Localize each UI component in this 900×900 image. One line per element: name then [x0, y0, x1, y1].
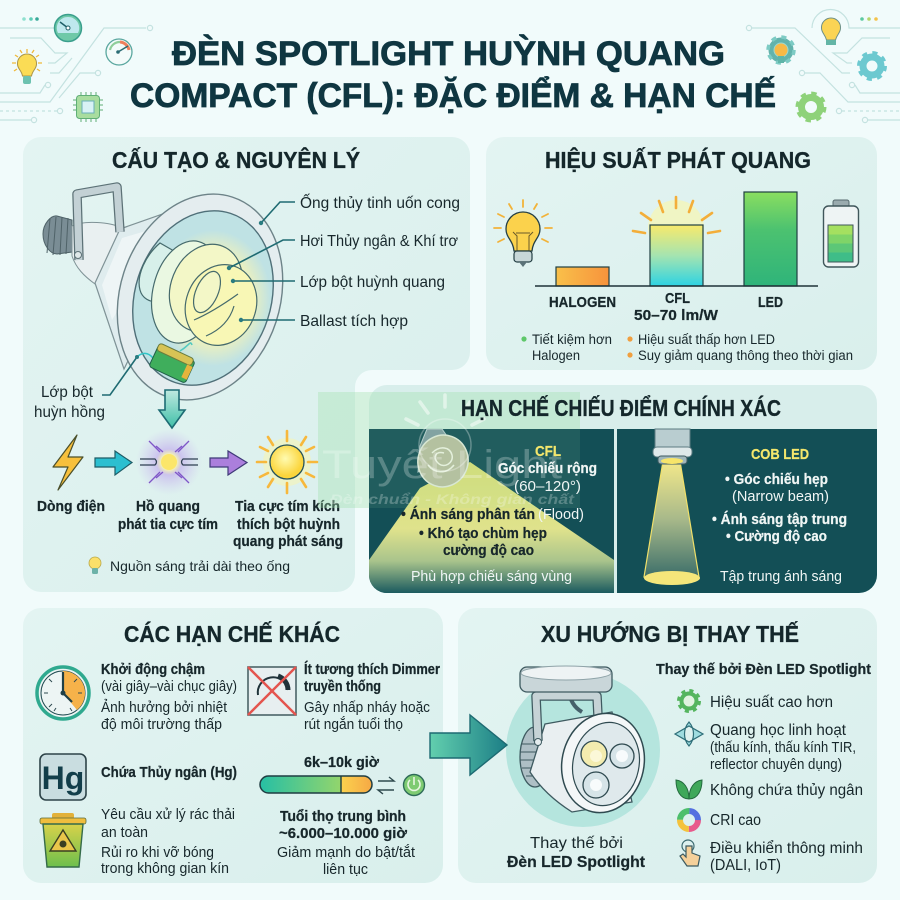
icon: battery — [824, 200, 858, 267]
icon: speedometer — [106, 39, 132, 65]
icon: sun — [257, 431, 317, 493]
icon: small bulb — [89, 557, 101, 574]
text: dimmer — [304, 661, 440, 733]
label: lớp bột huỳn hồng — [34, 384, 105, 421]
heading: HIỆU SUẤT PHÁT QUANG — [545, 146, 811, 173]
text: cob led: (Narrow beam) — [732, 488, 829, 505]
text: dimmer: Gây nhấp nháy hoặc — [304, 699, 430, 716]
icon: swap arrows — [378, 777, 394, 794]
panel: cấu tạo & nguyên lý — [23, 137, 470, 592]
heading: hạn chế chiếu điểm: HẠN CHẾ CHIẾU ĐIỂM CHÍNH XÁC — [461, 394, 781, 421]
text: cfl: Góc chiếu rộng — [498, 460, 597, 477]
icon: cob lamp — [653, 429, 692, 464]
heading: CÁC HẠN CHẾ KHÁC — [124, 620, 340, 647]
label: cfl: CFL — [665, 290, 690, 307]
label: tia cực tím: quang phát sáng — [233, 533, 343, 550]
icon: Hg: Hg — [42, 760, 84, 796]
arrow: down — [159, 390, 185, 428]
panel: các hạn chế khác — [23, 608, 443, 883]
icon: CFL spotlight cutaway — [43, 172, 309, 422]
spiral tube — [139, 233, 268, 355]
text: cfl: (60–120°) — [514, 478, 581, 495]
panel: hạn chế chiếu điểm chính xác — [369, 385, 877, 593]
text: tuổi thọ: liên tục — [323, 861, 368, 878]
icon: clock — [37, 667, 89, 719]
text: cfl: Phù hợp chiếu sáng vùng — [411, 568, 572, 585]
label: tia cực tím — [233, 498, 343, 550]
text: cfl: cường độ cao — [443, 542, 534, 559]
label: cfl: 50–70 lm/W — [634, 307, 719, 324]
decorative circuit lines left — [0, 25, 153, 123]
text: cob led: Tập trung ánh sáng — [720, 568, 842, 585]
icon: dimmer crossed — [248, 667, 296, 715]
text: quang học — [710, 722, 856, 773]
icon: gear — [678, 690, 700, 712]
text: khởi động chậm — [101, 661, 237, 733]
chart: lifetime bar — [260, 776, 372, 793]
icon: leaf — [676, 780, 702, 799]
icon: microchip — [73, 92, 103, 122]
text: tuổi thọ: Tuổi thọ trung bình — [280, 808, 406, 825]
ballast — [149, 343, 196, 383]
text: cfl — [401, 443, 597, 585]
caption: Thay thế bởi — [530, 835, 623, 852]
icon: bulb — [494, 200, 552, 267]
label: lớp bột huỳn hồng: huỳn hồng — [34, 404, 105, 421]
icon: CRI wheel — [680, 811, 698, 829]
panel: hiệu suất phát quang — [486, 137, 877, 370]
label: lớp bột huỳnh quang: Lớp bột huỳnh quang — [300, 274, 445, 291]
text: cfl: (Flood) — [538, 506, 584, 523]
arrow: big transition — [430, 715, 507, 775]
icon: cfl lamp — [411, 428, 475, 494]
label: dòng điện: Dòng điện — [37, 498, 105, 515]
text: dimmer: truyền thống — [304, 678, 381, 695]
text: cri: CRI cao — [710, 812, 761, 829]
arrow: purple — [210, 451, 247, 475]
text: cob led: COB LED — [751, 446, 809, 463]
title: ĐÈN SPOTLIGHT HUỲNH QUANG — [172, 35, 725, 73]
watermark: Tuyết Light — [322, 443, 562, 487]
heading: XU HƯỚNG BỊ THAY THẾ — [541, 620, 799, 647]
text: điều khiển — [710, 840, 863, 874]
icon: gear with bulb — [768, 37, 794, 63]
label: led: LED — [758, 294, 783, 311]
label: ống thủy tinh: Ống thủy tinh uốn cong — [300, 192, 460, 212]
text: cfl: CFL — [535, 443, 561, 460]
text: dimmer: rút ngắn tuổi thọ — [304, 716, 403, 733]
heading: thay thế bởi: Thay thế bởi Đèn LED Spotlight — [656, 661, 871, 678]
text: khởi động chậm: Khởi động chậm — [101, 661, 205, 678]
text: tuổi thọ: ~6.000–10.000 giờ — [279, 825, 407, 842]
icon: lightbulb right — [821, 18, 841, 45]
text: rác thải — [101, 806, 235, 877]
label: hồ quang: phát tia cực tím — [118, 516, 218, 533]
text: rác thải: trong không gian kín — [101, 860, 229, 877]
icon: arc star — [136, 429, 202, 495]
text: khởi động chậm: (vài giây–vài chục giây) — [101, 678, 237, 695]
icon: gauge top left — [54, 14, 82, 42]
caption — [507, 835, 646, 871]
label: hồ quang — [118, 498, 218, 533]
text: quang học: (thấu kính, thấu kính TIR, — [710, 739, 856, 756]
text: quang học: reflector chuyên dụng) — [710, 756, 842, 773]
label: tia cực tím: thích bột huỳnh — [237, 516, 340, 533]
text: cfl: • Khó tạo chùm hẹp — [419, 525, 547, 542]
icon: three dots left — [22, 17, 39, 21]
text: điều khiển: (DALI, IoT) — [710, 857, 781, 874]
arrow: teal — [95, 451, 132, 475]
label: lớp bột huỳn hồng: Lớp bột — [41, 384, 94, 401]
text: tuổi thọ — [277, 808, 416, 878]
icon: lens — [675, 722, 703, 746]
bar chart — [535, 192, 818, 286]
icon: dots right — [860, 17, 878, 21]
note: tiết kiệm: Halogen — [532, 348, 580, 363]
icon: hazard bin — [40, 813, 86, 867]
icon: lightning — [53, 435, 83, 490]
text: khởi động chậm: độ môi trường thấp — [101, 716, 222, 733]
leader lines — [102, 202, 295, 395]
label: halogen: HALOGEN — [549, 294, 616, 311]
icon: green gear — [798, 94, 824, 120]
text: điều khiển: Điều khiển thông minh — [710, 840, 863, 857]
label: 6k-10k: 6k–10k giờ — [304, 754, 379, 771]
icon: power — [404, 774, 424, 796]
note: tiết kiệm: Tiết kiệm hơn — [532, 332, 612, 347]
note: tiết kiệm — [521, 332, 612, 363]
title: COMPACT (CFL): ĐẶC ĐIỂM & HẠN CHẾ — [130, 77, 776, 115]
panel: xu hướng bị thay thế — [458, 608, 877, 883]
text: cob led: • Ánh sáng tập trung — [712, 511, 847, 528]
text: dimmer: Ít tương thích Dimmer — [304, 661, 440, 678]
text: rác thải: Rủi ro khi vỡ bóng — [101, 844, 214, 861]
label: tia cực tím: Tia cực tím kích — [235, 498, 340, 515]
text: rác thải: Yêu cầu xử lý rác thải — [101, 806, 235, 823]
text: quang học: Quang học linh hoạt — [710, 722, 847, 739]
heading: CẤU TẠO & NGUYÊN LÝ — [112, 146, 360, 173]
icon: LED spotlight — [506, 666, 660, 827]
watermark: Đèn chuẩn - Không gian chất — [330, 491, 576, 507]
watermark — [318, 392, 580, 508]
icon: touch hand — [680, 840, 700, 866]
note: hiệu suất: Suy giảm quang thông theo thời gian — [638, 348, 853, 363]
sub-panel: CFL background — [369, 428, 614, 593]
text: không thủy ngân: Không chứa thủy ngân — [710, 782, 863, 799]
icon: teal gear — [859, 53, 885, 79]
title — [130, 35, 776, 115]
decorative circuit lines right — [746, 10, 900, 123]
text: hiệu suất: Hiệu suất cao hơn — [710, 694, 833, 711]
text: tuổi thọ: Giảm mạnh do bật/tắt — [277, 844, 416, 861]
label: hơi thủy ngân: Hơi Thủy ngân & Khí trơ — [300, 233, 458, 250]
note: hiệu suất — [627, 332, 853, 363]
note: Nguồn sáng trải dài theo ống — [110, 558, 290, 574]
note: hiệu suất: Hiệu suất thấp hơn LED — [638, 332, 775, 347]
text: cob led — [712, 446, 847, 585]
sub-panel: COB LED background — [617, 429, 877, 593]
text: chứa thủy ngân: Chứa Thủy ngân (Hg) — [101, 764, 237, 781]
icon: lightbulb left — [12, 49, 42, 84]
text: rác thải: an toàn — [101, 824, 148, 841]
text: cob led: • Cường độ cao — [726, 528, 827, 545]
text: khởi động chậm: Ảnh hưởng bởi nhiệt — [101, 699, 228, 716]
label: ballast: Ballast tích hợp — [300, 313, 408, 330]
text: cfl: • Ánh sáng phân tán — [401, 506, 535, 523]
caption: Đèn LED Spotlight — [507, 854, 646, 871]
label: hồ quang: Hồ quang — [136, 498, 200, 515]
text: cob led: • Góc chiếu hẹp — [725, 471, 828, 488]
label: cfl — [634, 290, 719, 324]
